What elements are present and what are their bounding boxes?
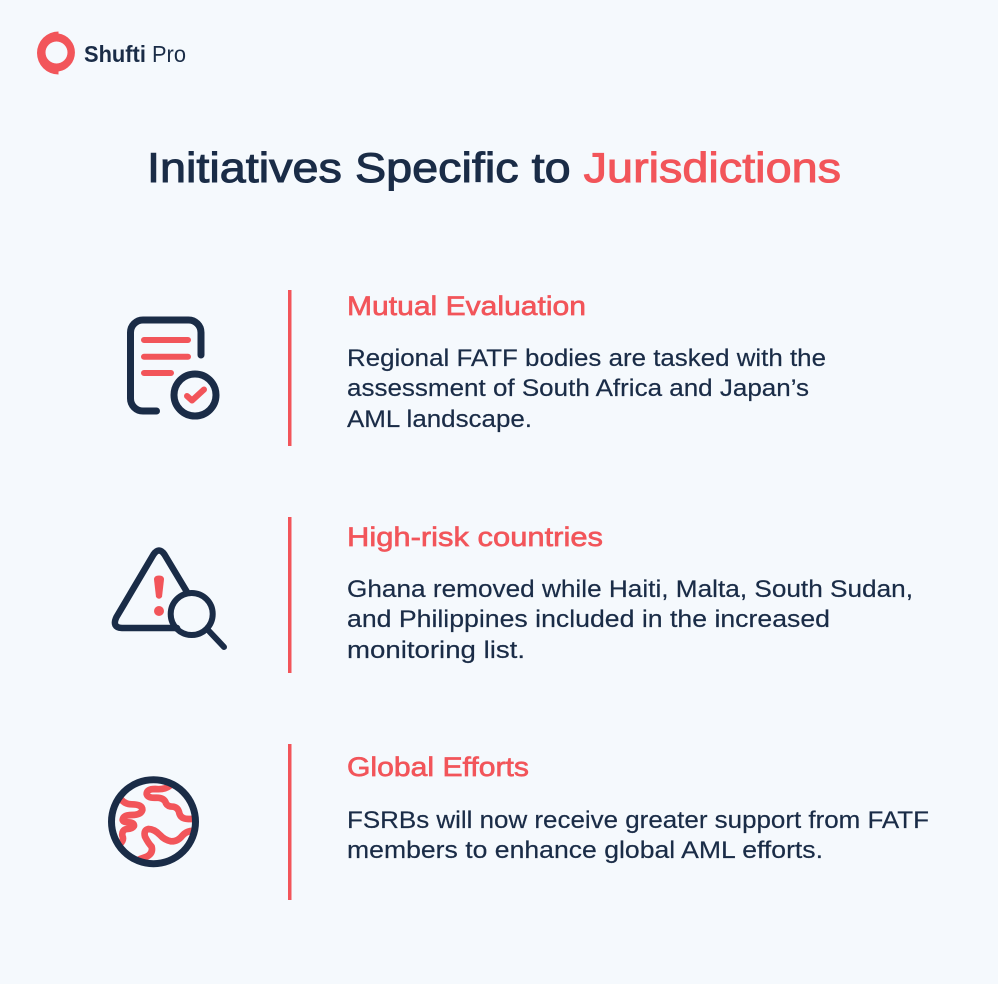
icon: document with check (130, 320, 216, 416)
body text: and Philippines included in the increased (347, 606, 830, 633)
title: Initiatives Specific to Jurisdictions (147, 144, 841, 191)
body text: assessment of South Africa and Japan’s (347, 375, 809, 402)
panel: Global Efforts (112, 744, 929, 900)
heading: High-risk countries (347, 522, 603, 552)
body text: Regional FATF bodies are tasked with the (347, 345, 826, 372)
heading: Mutual Evaluation (347, 291, 586, 321)
icon: logo ring (37, 32, 75, 74)
body text: Ghana removed while Haiti, Malta, South Sudan, (347, 576, 913, 603)
body text: FSRBs will now receive greater support from FATF (347, 807, 929, 834)
divider bar (288, 744, 292, 900)
divider bar (288, 290, 292, 446)
logo wordmark: Shufti Pro (84, 41, 186, 67)
body text (347, 345, 826, 433)
body text: AML landscape. (347, 406, 532, 433)
body text (347, 807, 929, 864)
icon: globe (112, 780, 196, 864)
logo: Shufti Pro (37, 32, 186, 74)
panel: High-risk countries (115, 517, 913, 673)
divider bar (288, 517, 292, 673)
panel: Mutual Evaluation (130, 290, 826, 446)
body text (347, 576, 913, 664)
icon: warning triangle with magnifier (115, 550, 224, 647)
body text: members to enhance global AML efforts. (347, 837, 823, 864)
body text: monitoring list. (347, 637, 525, 664)
heading: Global Efforts (347, 752, 529, 782)
